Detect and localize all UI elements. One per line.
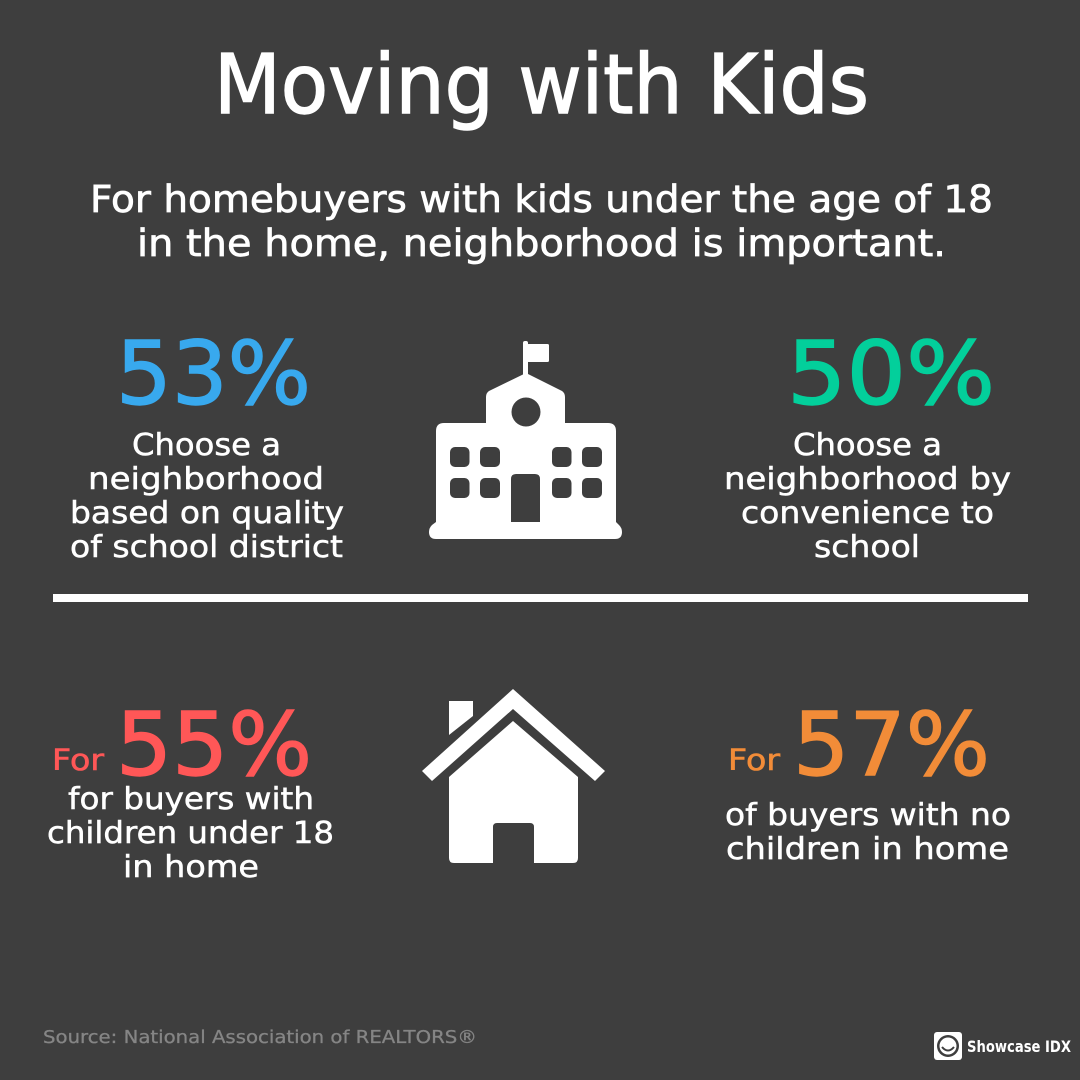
- stat: 57% buyers with no children: [725, 694, 1011, 867]
- stat: 55% buyers with children: children under 18: [47, 816, 334, 851]
- stat: 53% school district quality: [70, 323, 344, 565]
- stat: 53% school district quality: 53%: [116, 323, 311, 425]
- title: Moving with Kids: [214, 38, 869, 133]
- stat: 50% convenience to school: convenience to: [741, 496, 994, 531]
- icon: school building: [429, 341, 622, 539]
- stat: 50% convenience to school: Choose a: [793, 428, 942, 463]
- stat: 53% school district quality: of school district: [70, 530, 343, 565]
- subtitle: [90, 178, 993, 265]
- stat: 57% buyers with no children: of buyers with no: [725, 798, 1011, 833]
- stat: 53% school district quality: based on quality: [70, 496, 344, 531]
- stat: 50% convenience to school: 50%: [787, 323, 995, 425]
- stat: 57% buyers with no children: 57%: [793, 694, 990, 796]
- logo: Showcase IDX: [934, 1032, 1072, 1060]
- stat: 57% buyers with no children: For: [728, 743, 780, 777]
- stat: 55% buyers with children: 55%: [116, 694, 312, 796]
- subtitle: in the home, neighborhood is important.: [137, 222, 946, 265]
- stat: 55% buyers with children: [47, 694, 334, 885]
- stat: 50% convenience to school: school: [814, 530, 920, 565]
- stat: 55% buyers with children: For: [52, 743, 104, 777]
- stat: 55% buyers with children: for buyers with: [68, 782, 314, 817]
- stat: 53% school district quality: neighborhood: [88, 462, 324, 497]
- stat: 53% school district quality: Choose a: [132, 428, 281, 463]
- source note: Source: National Association of REALTORS®: [43, 1027, 477, 1048]
- stat: 50% convenience to school: [724, 323, 1011, 565]
- icon: house: [422, 689, 605, 863]
- stat: 57% buyers with no children: children in home: [726, 832, 1009, 867]
- subtitle: For homebuyers with kids under the age of 18: [90, 178, 993, 221]
- stat: 50% convenience to school: neighborhood by: [724, 462, 1011, 497]
- stat: 55% buyers with children: in home: [123, 850, 259, 885]
